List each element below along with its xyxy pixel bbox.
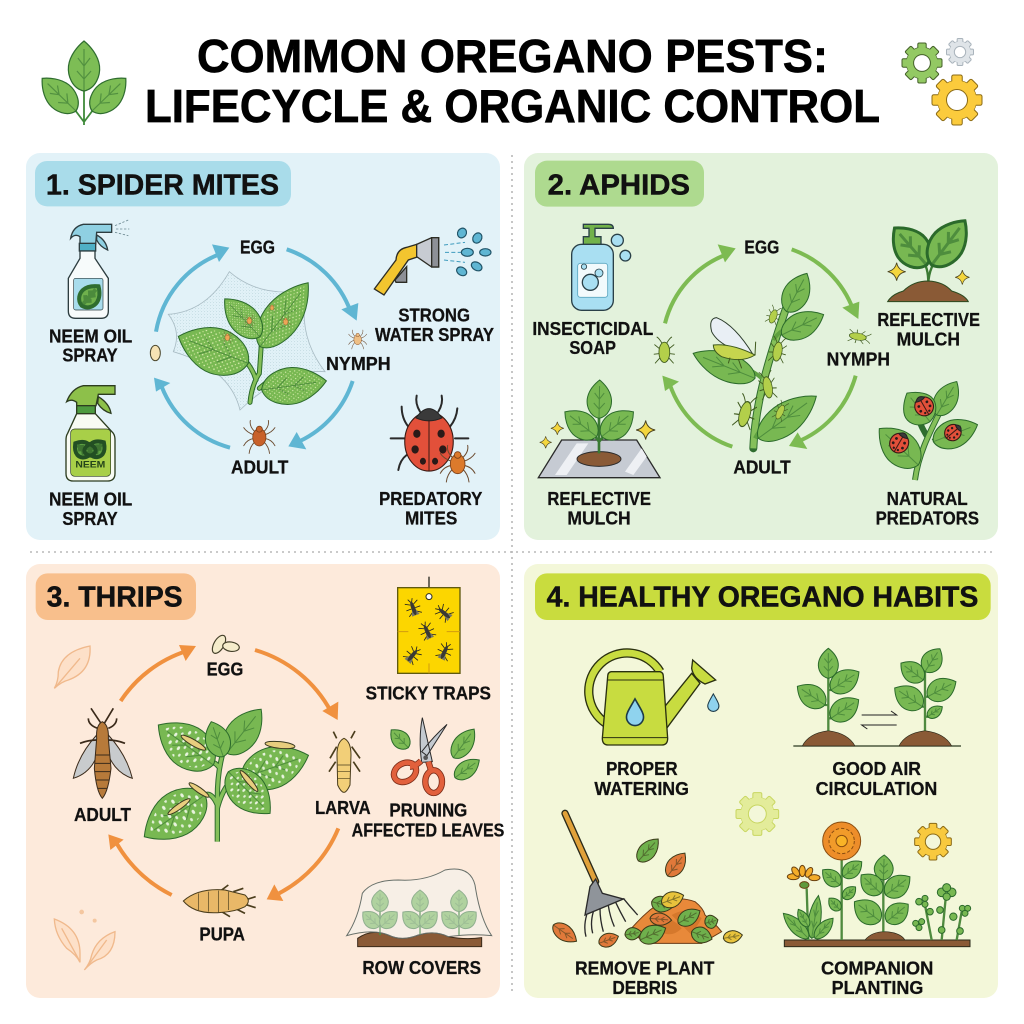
lifecycle stage labels: EGG <box>207 659 243 680</box>
label: insecticidal soap: SOAP <box>569 337 616 358</box>
icon: gear pale <box>736 793 779 835</box>
label: reflective mulch: REFLECTIVE <box>877 309 980 330</box>
label: proper watering: PROPER <box>606 758 678 779</box>
heading: spider mites <box>35 161 291 206</box>
label: reflective mulch: MULCH <box>897 329 960 350</box>
title <box>145 30 880 132</box>
icon: spray bottle <box>68 220 129 318</box>
label: row covers: ROW COVERS <box>362 957 481 978</box>
icon: neem bottle <box>66 386 115 481</box>
label: pruning affected leaves: AFFECTED LEAVES <box>352 820 504 841</box>
icon: row cover <box>347 869 492 947</box>
icon: aphid nymph <box>848 328 872 345</box>
heading: healthy habits: 4. HEALTHY OREGANO HABITS <box>547 582 978 614</box>
lifecycle stage labels: NYMPH <box>827 349 890 370</box>
label: insecticidal soap <box>532 318 653 358</box>
plant with aphids <box>688 267 829 451</box>
panel: thrips <box>26 564 504 998</box>
label: neem oil spray: SPRAY <box>62 345 118 366</box>
panel: healthy oregano habits <box>524 564 998 998</box>
icon: gears <box>902 38 982 125</box>
label: pruning affected leaves: PRUNING <box>389 800 467 821</box>
label: neem oil spray: NEEM OIL <box>49 325 132 346</box>
label: predatory mites <box>379 488 482 528</box>
title: COMMON OREGANO PESTS: <box>197 30 828 82</box>
lifecycle stage labels: EGG <box>744 236 779 257</box>
icon: ladybug and predatory mite <box>391 396 475 482</box>
label: proper watering <box>594 758 689 799</box>
dotted dividers <box>30 155 995 995</box>
icon: faint leaves bottom <box>54 910 115 970</box>
plant with thrips damage <box>132 700 315 855</box>
label: remove plant debris <box>575 957 714 998</box>
icon: ladybugs on plant <box>868 376 982 480</box>
heading: aphids <box>535 161 704 207</box>
label: remove plant debris: DEBRIS <box>612 977 677 998</box>
label: good air circulation <box>816 758 937 799</box>
label: strong water spray: STRONG <box>398 305 470 326</box>
icon: sticky trap <box>398 577 460 673</box>
lifecycle stage labels: ADULT <box>74 804 131 825</box>
label: predatory mites: PREDATORY <box>379 488 482 509</box>
icon: soap bottle <box>572 224 631 310</box>
label: strong water spray: WATER SPRAY <box>375 324 494 345</box>
lifecycle arrows <box>662 244 859 449</box>
lifecycle stage labels <box>74 659 371 945</box>
icon: egg <box>150 345 160 361</box>
icon: watering can <box>589 653 719 745</box>
heading: thrips <box>36 573 196 620</box>
icon: nymph mite <box>349 330 367 349</box>
lifecycle stage labels <box>733 236 890 477</box>
label: strong water spray <box>375 305 494 345</box>
label: neem oil spray 2 <box>49 489 132 529</box>
label: natural predators: NATURAL <box>887 488 968 509</box>
label: pruning affected leaves <box>352 800 504 841</box>
panel: spider mites <box>26 153 500 540</box>
label: good air circulation: GOOD AIR <box>832 758 921 779</box>
icon: rake and leaf pile <box>549 813 743 950</box>
icon: eggs <box>210 633 240 655</box>
icon: adult mite <box>244 420 275 453</box>
label: proper watering: WATERING <box>594 778 689 799</box>
title: LIFECYCLE & ORGANIC CONTROL <box>145 80 880 132</box>
lifecycle arrows <box>154 244 358 449</box>
plant with webbing <box>168 272 329 410</box>
icon: gear yellow <box>915 823 951 860</box>
heading: spider mites: 1. SPIDER MITES <box>46 169 279 201</box>
icon: neem bottle: NEEM <box>75 460 105 470</box>
label: companion planting: PLANTING <box>832 977 923 998</box>
label: natural predators <box>876 488 979 528</box>
icon: spaced plants with airflow <box>791 643 961 746</box>
lifecycle stage labels: EGG <box>240 236 275 257</box>
label: companion planting <box>821 957 933 998</box>
label: companion planting: COMPANION <box>821 957 933 978</box>
icon: thrips pupa <box>183 885 256 917</box>
icon: mulch sprout <box>882 211 978 302</box>
lifecycle stage labels: LARVA <box>315 797 371 818</box>
label: sticky traps: STICKY TRAPS <box>366 682 491 703</box>
label: predatory mites: MITES <box>405 507 457 528</box>
label: neem oil spray 2: SPRAY <box>62 508 118 529</box>
label: reflective mulch 2 <box>547 488 651 528</box>
panel: aphids <box>524 153 998 540</box>
heading: thrips: 3. THRIPS <box>47 582 183 614</box>
icon: adult thrips <box>73 708 132 798</box>
label: insecticidal soap: INSECTICIDAL <box>532 318 653 339</box>
icon: faint leaf top <box>54 646 90 688</box>
label: neem oil spray <box>49 325 132 366</box>
icon: thrips larva <box>329 731 360 792</box>
lifecycle stage labels: ADULT <box>231 456 288 477</box>
lifecycle stage labels: ADULT <box>733 456 791 477</box>
lifecycle arrows <box>108 645 338 901</box>
icon: reflective sheet plant <box>538 380 660 478</box>
label: reflective mulch 2: MULCH <box>567 507 631 528</box>
label: good air circulation: CIRCULATION <box>816 778 937 799</box>
heading: healthy habits <box>535 573 991 620</box>
icon: scissors and leaves <box>385 718 484 793</box>
label: natural predators: PREDATORS <box>876 507 979 528</box>
lifecycle stage labels: PUPA <box>199 924 245 945</box>
label: remove plant debris: REMOVE PLANT <box>575 957 714 978</box>
icon: aphid adult <box>654 337 675 363</box>
lifecycle stage labels: NYMPH <box>326 353 391 374</box>
label: reflective mulch <box>877 309 980 350</box>
heading: aphids: 2. APHIDS <box>548 169 690 201</box>
icon: water hose <box>374 227 491 295</box>
icon: companion planting <box>779 822 971 947</box>
label: neem oil spray 2: NEEM OIL <box>49 489 132 510</box>
icon: oregano sprig <box>32 41 136 125</box>
label: reflective mulch 2: REFLECTIVE <box>547 488 651 509</box>
lifecycle stage labels <box>231 236 391 477</box>
